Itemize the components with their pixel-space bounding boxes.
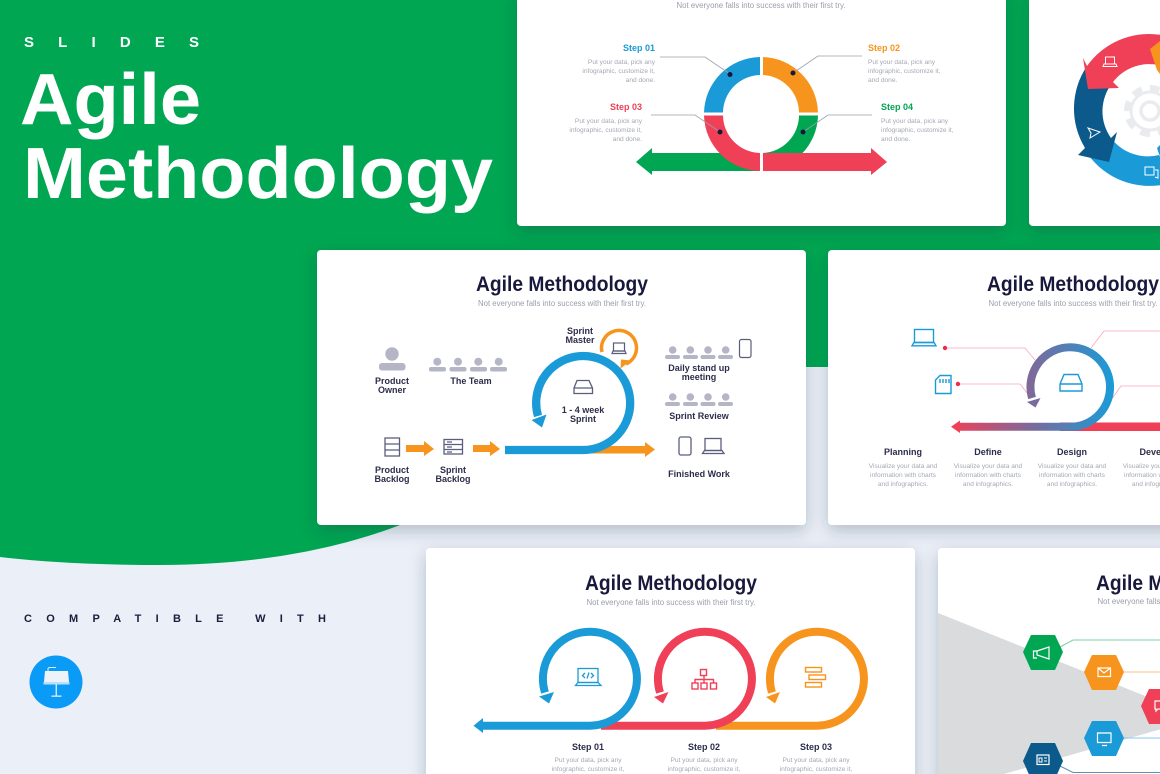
brand label: slides: SLIDES [24, 34, 199, 51]
icon: sd card [936, 376, 951, 394]
sprint master label: Master [565, 335, 595, 345]
panel: three step spirals slide [426, 548, 915, 774]
panel: hexagon funnel slide [938, 548, 1160, 774]
orange arrows to sprint [406, 441, 500, 456]
sprint backlog label [435, 465, 471, 484]
daily stand up: meeting [682, 372, 716, 382]
step 02 text [868, 43, 941, 84]
step 01 text: Put your data, pick any [588, 59, 656, 66]
define column [954, 447, 1023, 488]
step 04 text: infographic, customize it, [881, 127, 954, 134]
icon: keynote badge [30, 656, 82, 708]
blue hexagon [1084, 721, 1124, 756]
step 02 text: infographic, customize it, [868, 68, 941, 75]
panel: circular arrows slide [1029, 0, 1160, 226]
subtitle: Not everyone falls into success with their first try. [478, 299, 646, 308]
panel: sprint process slide [317, 250, 806, 525]
red right arrow [763, 148, 887, 175]
step 02 text: and done. [868, 77, 898, 84]
design column: and infographics. [1047, 481, 1097, 488]
connector dots [718, 70, 806, 134]
light blue ring segment [1085, 138, 1160, 186]
green curved header background [0, 0, 1160, 565]
finished work [668, 437, 731, 479]
step 01 column: infographic, customize it, [552, 766, 624, 773]
sprint duration label: Sprint [570, 414, 596, 424]
icon: sprint backlog [444, 440, 462, 454]
sprint review [665, 393, 733, 421]
red arc segment [704, 116, 760, 171]
planning column: and infographics. [878, 481, 928, 488]
sprint duration label [562, 405, 605, 424]
grey funnel shape [938, 613, 1160, 774]
step 04 text: Step 04 [881, 102, 913, 112]
sprint backlog label: Backlog [435, 474, 471, 484]
subtitle: Not everyone falls into success with their first try. [676, 1, 846, 10]
icon: laptop [912, 330, 936, 346]
daily stand up [665, 340, 751, 382]
design column: Design [1057, 447, 1087, 457]
design column: Visualize your data and [1038, 463, 1107, 470]
product backlog label: Product [375, 465, 409, 475]
daily stand up: Daily stand up [668, 363, 730, 373]
step 01 text: and done. [626, 77, 655, 84]
blue sprint loop [505, 356, 630, 450]
planning column: Planning [884, 447, 922, 457]
subtitle: Not everyone falls into success with their first try. [988, 299, 1158, 308]
icon: chat [1145, 167, 1158, 178]
develop column [1123, 447, 1160, 488]
blue arc segment [704, 57, 760, 112]
planning column: information with charts [870, 472, 937, 479]
step 02 column: Step 02 [688, 742, 720, 752]
planning column: Visualize your data and [869, 463, 938, 470]
red arrow band [1060, 422, 1160, 431]
dark blue ring arrow [1074, 66, 1117, 162]
red ring arrow [1083, 34, 1160, 89]
icon: code laptop [576, 668, 601, 686]
the team: The Team [450, 376, 492, 386]
product backlog label: Backlog [374, 474, 410, 484]
connector lines [1060, 640, 1160, 772]
design column [1038, 447, 1107, 488]
orange spiral [716, 632, 864, 726]
step 01 text: Step 01 [623, 43, 655, 53]
connector dots [943, 346, 960, 386]
step 04 text [881, 102, 954, 143]
step 02 column: Put your data, pick any [670, 757, 738, 764]
step 03 text: infographic, customize it, [569, 127, 642, 134]
finished work: Finished Work [668, 469, 731, 479]
step 03 column: Put your data, pick any [782, 757, 850, 764]
orange arc segment [763, 57, 818, 112]
icon: paper plane [1088, 128, 1100, 138]
pink connector lines [945, 331, 1160, 400]
icon: network [692, 670, 716, 689]
step 01 column [552, 742, 624, 773]
icon: gantt [806, 668, 826, 687]
orange ring piece [1150, 41, 1160, 74]
product owner: Owner [378, 385, 406, 395]
blue spiral [474, 632, 637, 733]
icon: drive [1060, 374, 1082, 391]
define column: information with charts [955, 472, 1022, 479]
sprint review: Sprint Review [669, 411, 730, 421]
panel: planning stages slide [828, 250, 1160, 525]
the team [429, 358, 507, 386]
green left arrow [636, 148, 760, 175]
step 02 text: Put your data, pick any [868, 59, 936, 66]
panel: four-step loop slide [517, 0, 1006, 226]
orange output arrow [590, 442, 655, 457]
step 03 column [780, 742, 852, 773]
sprint backlog label: Sprint [440, 465, 466, 475]
orange hexagon [1084, 655, 1124, 690]
icon: laptop [612, 343, 626, 354]
define column: and infographics. [963, 481, 1013, 488]
sprint duration label: 1 - 4 week [562, 405, 605, 415]
step 03 text: Put your data, pick any [575, 118, 643, 125]
icon: drive [574, 380, 592, 394]
step 01 text: infographic, customize it, [582, 68, 655, 75]
define column: Visualize your data and [954, 463, 1023, 470]
title: Agile Methodology [585, 572, 757, 595]
step 04 text: Put your data, pick any [881, 118, 949, 125]
dark blue hexagon [1023, 743, 1063, 774]
sprint master label [565, 326, 595, 345]
step 01 column: Step 01 [572, 742, 604, 752]
planning column [869, 447, 938, 488]
step 03 column: Step 03 [800, 742, 832, 752]
product owner [375, 347, 409, 395]
title: Agile Methodology [476, 273, 648, 296]
icon: product backlog [385, 438, 400, 456]
orange sprint master loop [602, 330, 637, 368]
green hexagon [1023, 635, 1063, 670]
step 02 text: Step 02 [868, 43, 900, 53]
main title: Agile [20, 60, 201, 140]
product backlog label [374, 465, 410, 484]
red spiral [601, 632, 752, 726]
step 03 text [569, 102, 643, 143]
subtitle: Not everyone falls into success with their first try. [586, 598, 756, 607]
step 03 text: Step 03 [610, 102, 642, 112]
define column: Define [974, 447, 1002, 457]
step 02 column [668, 742, 740, 773]
step 01 column: Put your data, pick any [554, 757, 622, 764]
step 03 column: infographic, customize it, [780, 766, 852, 773]
compatible with label: COMPATIBLE WITH [24, 613, 326, 625]
step 03 text: and done. [613, 136, 642, 143]
step 02 column: infographic, customize it, [668, 766, 740, 773]
icon: laptop [1103, 57, 1117, 66]
green arc segment [763, 116, 818, 171]
step 04 text: and done. [881, 136, 911, 143]
red hexagon [1141, 689, 1160, 724]
main title [20, 60, 493, 214]
gradient loop arrow [951, 347, 1110, 433]
main title: Methodology [23, 134, 493, 214]
icon: gear [1127, 88, 1160, 134]
connector lines [651, 56, 872, 132]
design column: information with charts [1039, 472, 1106, 479]
product owner: Product [375, 376, 409, 386]
sprint master label: Sprint [567, 326, 593, 336]
step 01 text [582, 43, 656, 84]
